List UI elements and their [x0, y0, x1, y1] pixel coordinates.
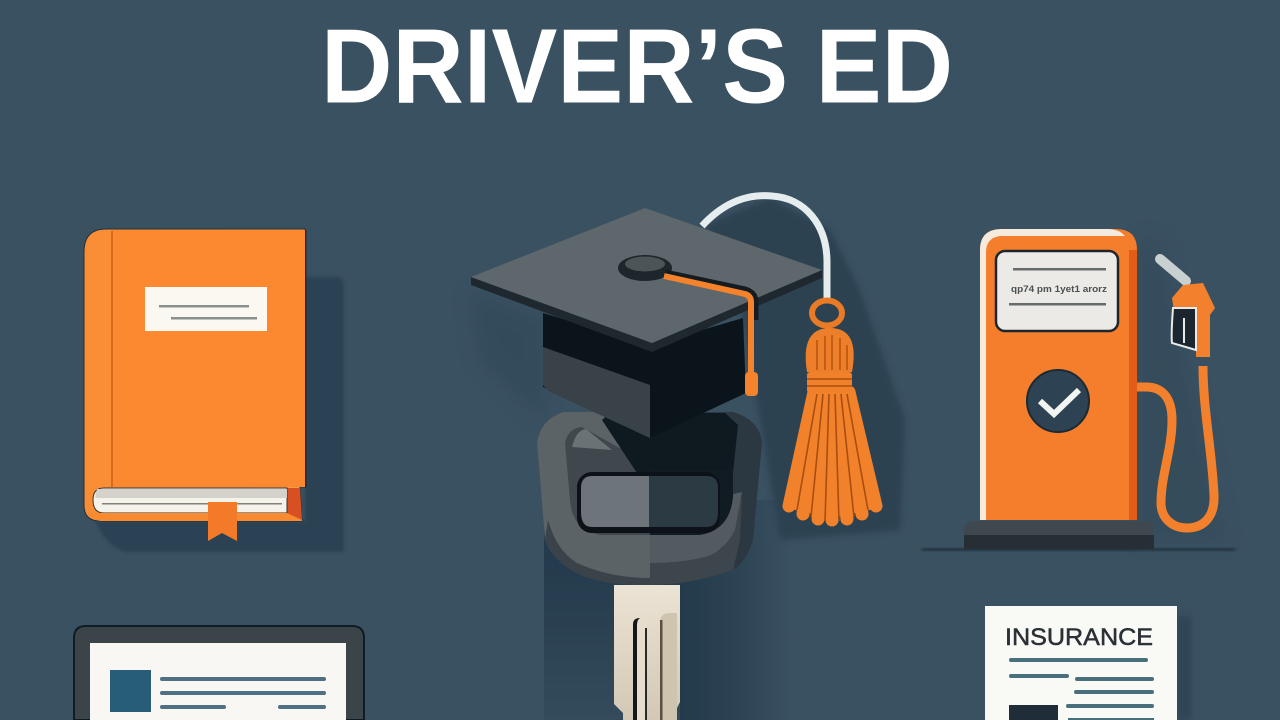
icon: orange book: [84, 229, 344, 552]
license photo: [110, 670, 151, 712]
icon: fuel pump: [922, 229, 1235, 551]
hose: [1137, 366, 1214, 528]
check badge: [1027, 370, 1089, 432]
pump screen: [996, 251, 1118, 331]
pump base: [964, 521, 1154, 549]
insurance heading: INSURANCE: [1005, 624, 1153, 651]
insurance lines: [1009, 658, 1154, 720]
insurance photo block: [1009, 705, 1058, 720]
cap underside: [543, 313, 746, 438]
bookmark: [208, 502, 237, 541]
white tassel cord: [702, 196, 827, 302]
orange cord: [664, 274, 758, 396]
cap board: [471, 208, 822, 352]
license lines: [160, 677, 326, 709]
icon: insurance document: [985, 606, 1191, 720]
book spine edge and pages: [88, 488, 302, 521]
pump screen: qp74 pm 1yet1 arorz: [1011, 284, 1107, 295]
title: DRIVER’S ED: [321, 8, 953, 126]
nozzle: [1160, 259, 1215, 357]
key blade: [614, 585, 680, 720]
book title label: [145, 287, 267, 331]
icon: license card: [74, 626, 364, 720]
icon: graduation cap and car key: [470, 196, 905, 720]
cap button: [618, 255, 672, 281]
tassel: [786, 300, 879, 521]
pump body: [980, 229, 1137, 520]
key fob: [537, 412, 762, 585]
key fob button: [577, 472, 720, 533]
